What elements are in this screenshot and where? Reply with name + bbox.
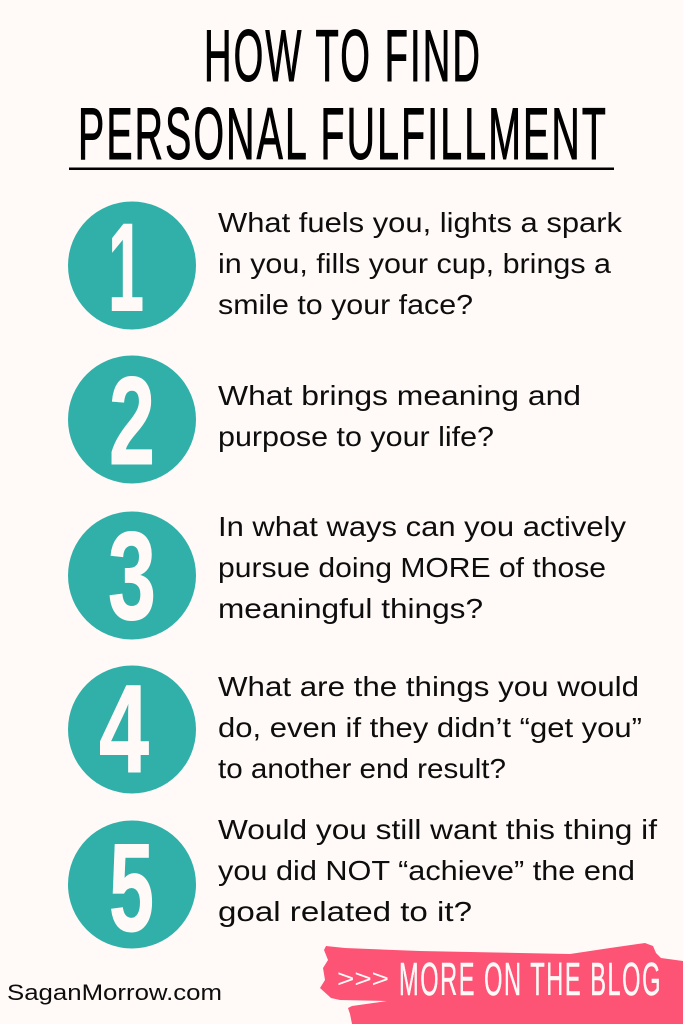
step 5 text: you did NOT “achieve” the end — [218, 855, 635, 886]
step 5 text: Would you still want this thing if — [218, 814, 657, 845]
number badge 3 — [68, 507, 196, 646]
step 1 text: What fuels you, lights a spark — [218, 207, 623, 238]
number badge 1 — [68, 198, 196, 338]
brush stroke background — [320, 943, 683, 1024]
number badge 4: 4 — [99, 660, 149, 799]
step 4 text: do, even if they didn’t “get you” — [218, 712, 642, 743]
step 1 text: in you, fills your cup, brings a — [218, 248, 611, 279]
step 3 text: In what ways can you actively — [218, 511, 626, 542]
number badge 5: 5 — [109, 819, 154, 958]
call to action banner — [320, 943, 683, 1024]
step 5 text — [218, 814, 657, 927]
step 2 text: What brings meaning and — [218, 380, 581, 411]
step 3 text: pursue doing MORE of those — [218, 552, 606, 583]
number badge 3: 3 — [108, 507, 156, 646]
step 1 text: smile to your face? — [218, 289, 473, 320]
number badge 4 — [68, 660, 196, 799]
title — [78, 16, 608, 175]
step 1 — [68, 198, 623, 338]
step 4 text: What are the things you would — [218, 671, 639, 702]
website credit: SaganMorrow.com — [7, 980, 222, 1005]
number badge 2: 2 — [109, 352, 155, 491]
number badge 5 — [68, 819, 196, 958]
step 2 text: purpose to your life? — [218, 421, 494, 452]
step 5 — [68, 814, 657, 958]
banner text: >>> — [337, 965, 389, 993]
step 4 text: to another end result? — [218, 753, 506, 784]
number badge 2 — [68, 352, 196, 491]
step 2 — [68, 352, 581, 491]
step 2 text — [218, 380, 581, 452]
number badge 1: 1 — [108, 198, 144, 338]
step 3 — [68, 507, 626, 646]
step 3 text: meaningful things? — [218, 593, 483, 624]
step 3 text — [218, 511, 626, 624]
step 4 text — [218, 671, 642, 784]
step 4 — [68, 660, 642, 799]
step 1 text — [218, 207, 623, 320]
step 5 text: goal related to it? — [218, 896, 472, 927]
